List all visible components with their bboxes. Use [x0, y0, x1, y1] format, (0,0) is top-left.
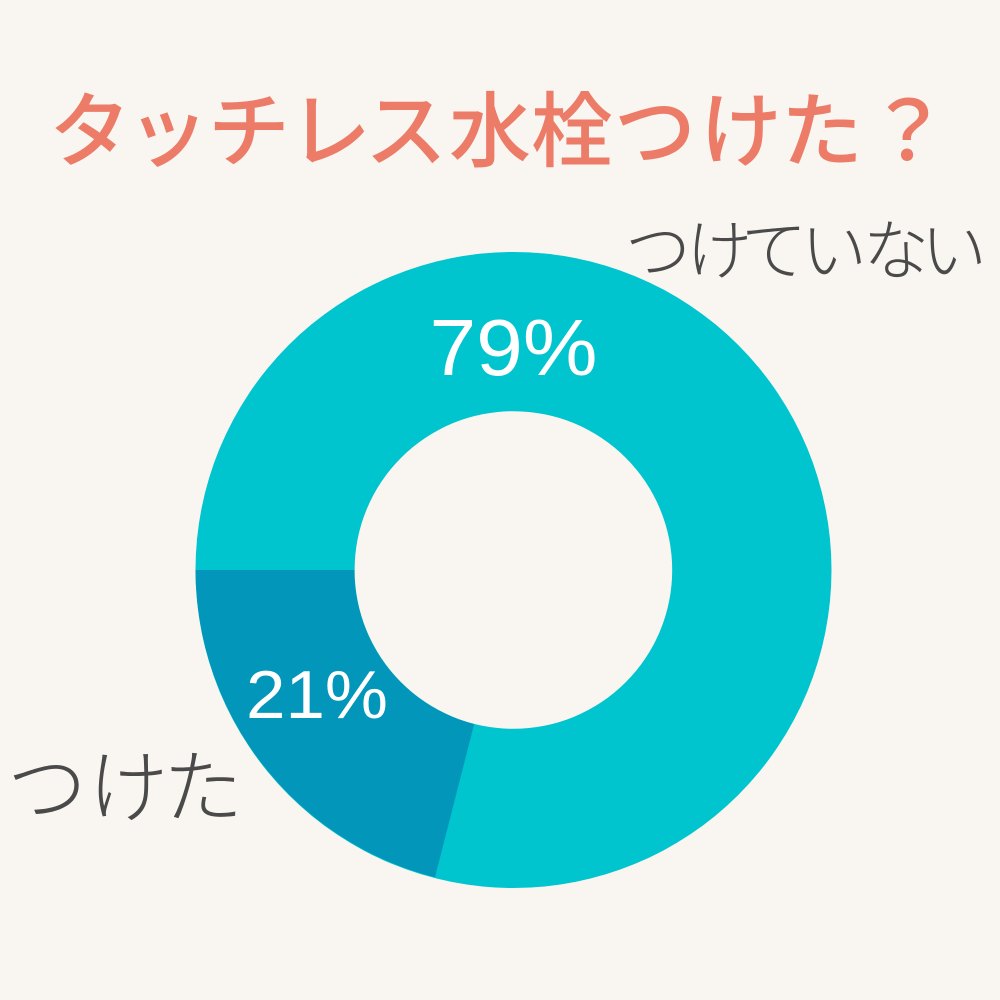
donut chart	[196, 252, 832, 888]
value label: 21%: 21%	[246, 657, 388, 733]
slice: 79% not installed	[196, 252, 832, 888]
title: タッチレス水栓つけた？	[49, 87, 949, 178]
slice: 21% installed	[196, 570, 474, 877]
donut hole	[355, 411, 672, 729]
category label: not installed: つけていない	[625, 214, 987, 288]
value label: 79%: 79%	[430, 303, 598, 392]
category label: installed: つけた	[7, 744, 243, 833]
